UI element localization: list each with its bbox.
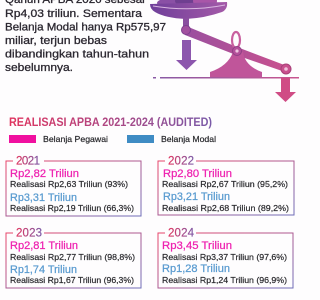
panel: 2023: Rp1,74 Triliun <box>10 264 77 276</box>
panel: 2023: Realisasi Rp1,67 Triliun (96,3%) <box>10 276 134 285</box>
panel: 2021 <box>6 156 141 216</box>
heading: REALISASI APBA 2021-2024 (AUDITED) <box>9 115 212 129</box>
panel: 2024: Rp3,45 Triliun <box>162 240 232 252</box>
arrow: purple down <box>176 40 197 70</box>
panel: 2023: Rp2,81 Triliun <box>10 240 78 252</box>
panel: 2024 <box>158 228 293 288</box>
ground line <box>160 77 299 78</box>
panel: 2023: Realisasi Rp2,77 Triliun (98,8%) <box>10 253 135 262</box>
legend: Belanja Pegawai: Belanja Pegawai <box>43 135 108 144</box>
panel: 2022: Realisasi Rp2,68 Triliun (89,2%) <box>162 204 289 213</box>
body text paragraph: miliar, terjun bebas <box>5 35 107 47</box>
panel: 2022: 2022 <box>168 156 194 168</box>
panel: 2021: Realisasi Rp2,63 Triliun (93%) <box>10 180 128 189</box>
legend: Belanja Modal: Belanja Modal <box>161 135 216 144</box>
body text paragraph: dibandingkan tahun-tahun <box>5 48 149 60</box>
panel: 2023 <box>6 228 141 288</box>
icon: balance scale <box>150 0 299 78</box>
panel: 2021: Rp2,82 Triliun <box>10 168 79 180</box>
panel: 2022: Rp2,80 Triliun <box>163 168 232 180</box>
body text paragraph <box>5 0 166 74</box>
legend <box>9 135 216 144</box>
panel: 2024: Realisasi Rp1,24 Triliun (96,9%) <box>162 276 287 285</box>
icon: stem and beam <box>182 18 291 74</box>
legend: Belanja Pegawai <box>9 135 108 144</box>
body text paragraph: sebelumnya. <box>5 62 73 74</box>
panel: 2021: Realisasi Rp2,19 Triliun (66,3%) <box>10 204 134 213</box>
panel: 2024: 2024 <box>168 228 195 240</box>
panel: 2024: Rp1,28 Triliun <box>162 263 230 275</box>
body text paragraph: Belanja Modal hanya Rp575,97 <box>5 22 166 34</box>
icon: pan <box>150 2 227 19</box>
panel: 2023: 2023 <box>16 228 42 240</box>
icon: coins in pan <box>157 0 217 9</box>
panel: 2021: Rp3,31 Triliun <box>10 192 77 204</box>
panel: 2024: Realisasi Rp3,37 Triliun (97,6%) <box>162 253 287 262</box>
arrow: pink down <box>275 78 296 102</box>
body text paragraph: Rp4,03 triliun. Sementara <box>5 8 143 20</box>
panel: 2022: Rp3,21 Triliun <box>163 191 230 203</box>
legend: Belanja Modal <box>127 135 216 144</box>
panel: 2022 <box>158 156 294 215</box>
panel: 2021: 2021 <box>16 156 40 168</box>
panel: 2022: Realisasi Rp2,67 Triliun (95,2%) <box>162 180 288 189</box>
icon: fulcrum base <box>210 32 262 78</box>
